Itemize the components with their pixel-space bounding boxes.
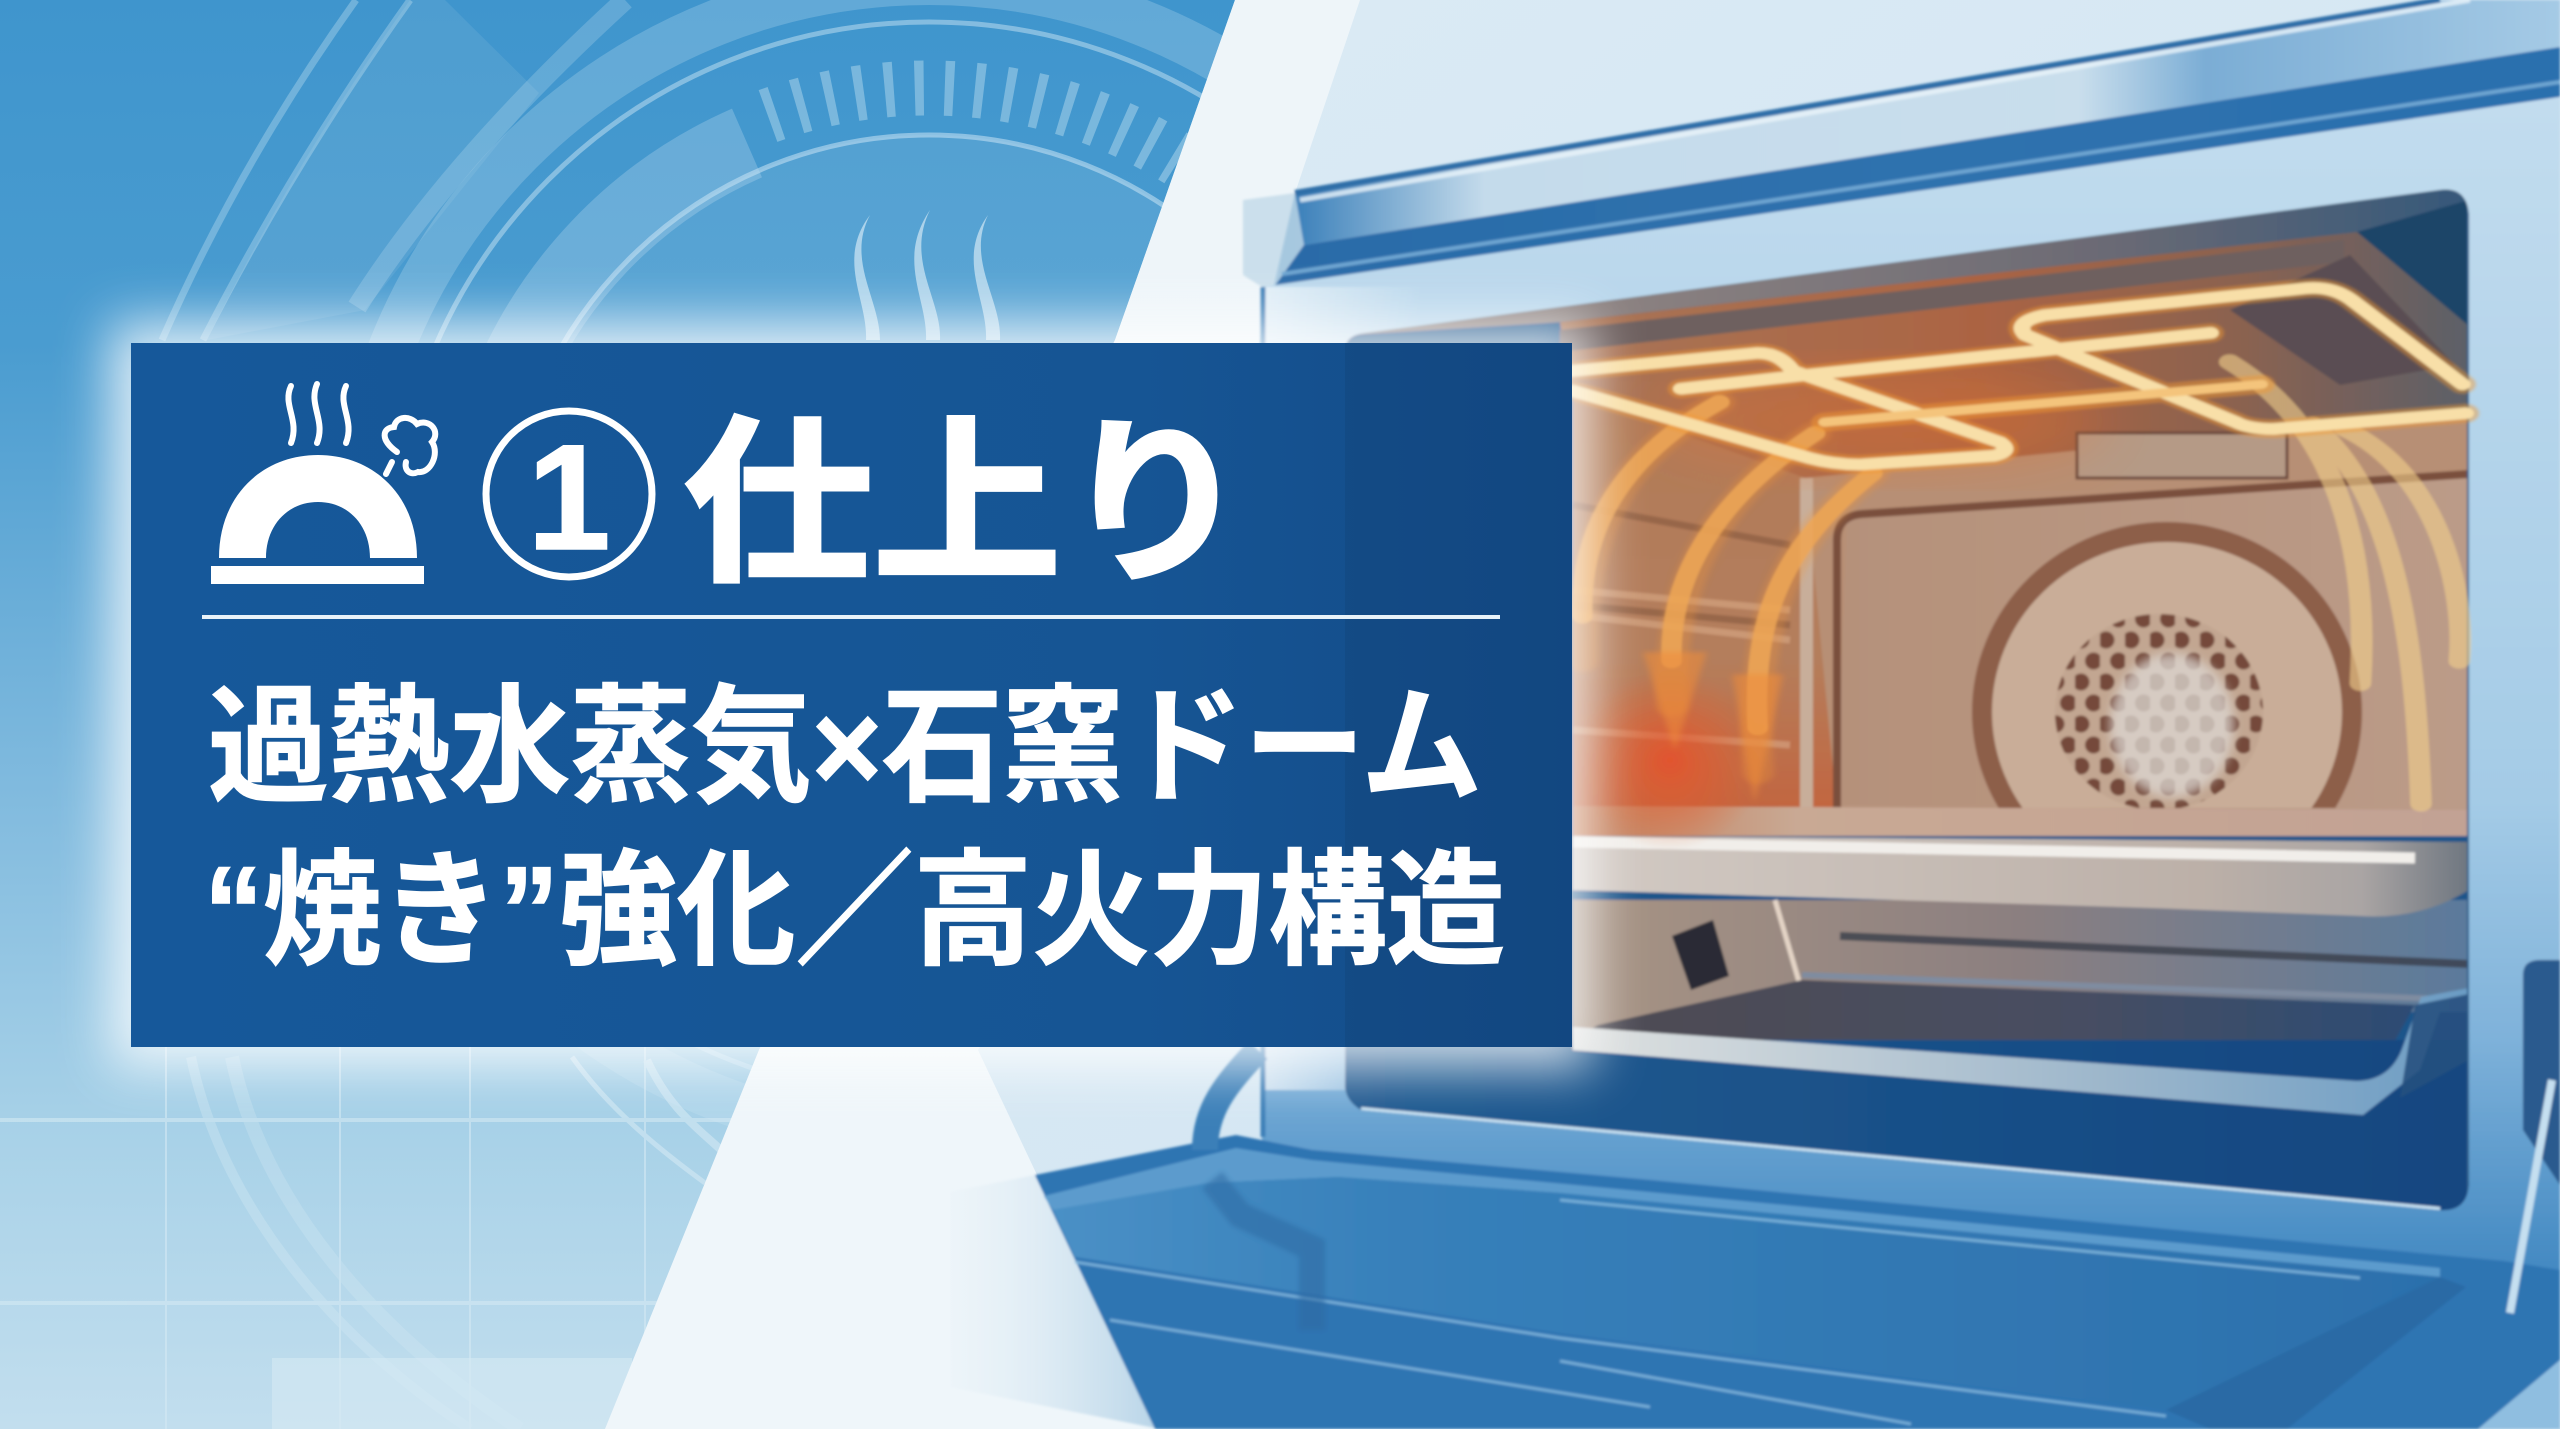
inner coil line [1825,384,2262,422]
lower tray back rim [1802,975,2469,1000]
lower tray side [2400,994,2469,1098]
oven front frame [1262,97,2560,1300]
panel glow [110,322,1592,1068]
heater coils and airflow arcs [1573,288,2466,804]
text line 2: “焼き”強化／高火力構造 [204,842,1505,981]
background: right pale area [605,0,2560,1429]
fan base [2040,600,2280,840]
background: faint steam icon [854,210,1000,340]
oven top plate [1274,0,2560,287]
ceiling [1560,232,2469,478]
ceiling right dark [2357,200,2469,326]
door ledge [1044,1148,2440,1277]
background: white diagonal band [605,0,1360,1429]
steam lines [288,384,349,443]
left chamber post [1775,900,1800,985]
divider [202,615,1500,619]
oven cavity [1340,180,2480,1220]
below-tray chamber [1573,900,2469,1040]
faded door reflection [950,1175,1155,1428]
coil lines [1573,288,2466,465]
top plate edge line [1295,0,2440,193]
door hinge reflection [1212,1180,1312,1330]
oven illustration [950,0,2560,1429]
panel [131,343,1572,1047]
ceiling bracket [2077,433,2287,478]
cavity base [1346,320,2469,1042]
frame left edge [1260,287,1266,1137]
ceiling upper band [1560,240,2344,352]
upper tray surface [1573,806,2469,836]
background: grid lines and lower arcs [0,1040,760,1429]
number badge [486,411,652,581]
square vent [1672,920,1729,990]
door right corner [2478,1360,2560,1429]
lower tray lip [1573,988,2469,1115]
fan gloss [2110,653,2234,797]
steam puff [385,418,435,474]
fan dome [1971,521,2363,809]
tray highlight [1573,842,2415,858]
cavity right shade [2467,200,2471,1210]
dome [1971,521,2363,809]
panel background [131,343,1572,1047]
background: light rectangle [272,1358,632,1429]
door trim highlights [1075,1200,2360,1424]
badge circle [486,411,652,577]
airflow arcs left [1582,402,1873,728]
icon: steaming dome oven [211,384,435,584]
back room fill [1808,418,2469,766]
cavity floor [1345,1040,2469,1215]
heading: 仕上り [684,405,1250,604]
back wall [1942,478,2467,810]
side rails [1573,505,1790,625]
side wall [1573,395,1837,830]
oven door [1035,1135,2560,1429]
hinge right dark plate [2523,960,2560,1185]
text line 1: 過熱水蒸気×石窯ドーム [208,676,1482,818]
ceiling right inner [2230,255,2455,385]
cavity bottom rim [1361,1110,2440,1210]
rail highlight [1282,82,2560,274]
badge number: 1 [527,413,611,581]
oven dark rail [1274,47,2560,287]
fan holes [2054,612,2264,810]
oven rail cap [1243,193,1304,287]
dome base [211,566,424,584]
cavity top rim [1345,186,2469,340]
wall post [1800,478,1813,812]
hinge right rod [2510,1080,2552,1313]
door right rim [2166,1277,2466,1429]
dome [219,455,417,558]
background: concentric dial rings and ticks [162,0,1507,1138]
wall outline [1837,474,2469,808]
upper tray body [1573,836,2469,916]
airflow arcs right [2230,362,2460,804]
below-tray dark line [1840,936,2469,964]
airflow arc glow [1582,402,1873,773]
ceiling glow [1650,370,2110,470]
lower tray floor [1573,980,2415,1085]
see-through oven strip [1345,343,1572,1047]
background: dial disc [504,135,1354,985]
coil glow [1573,288,2466,465]
red heat glow [1575,670,1765,850]
door glass [1053,1177,2440,1410]
airflow arrowheads [1643,652,1783,804]
perforated fan [2054,612,2264,810]
frame left fade [1262,287,1422,1090]
side rails light [1573,590,1790,745]
top plate highlight [1300,0,2470,200]
door hinge left [1205,1050,1258,1150]
